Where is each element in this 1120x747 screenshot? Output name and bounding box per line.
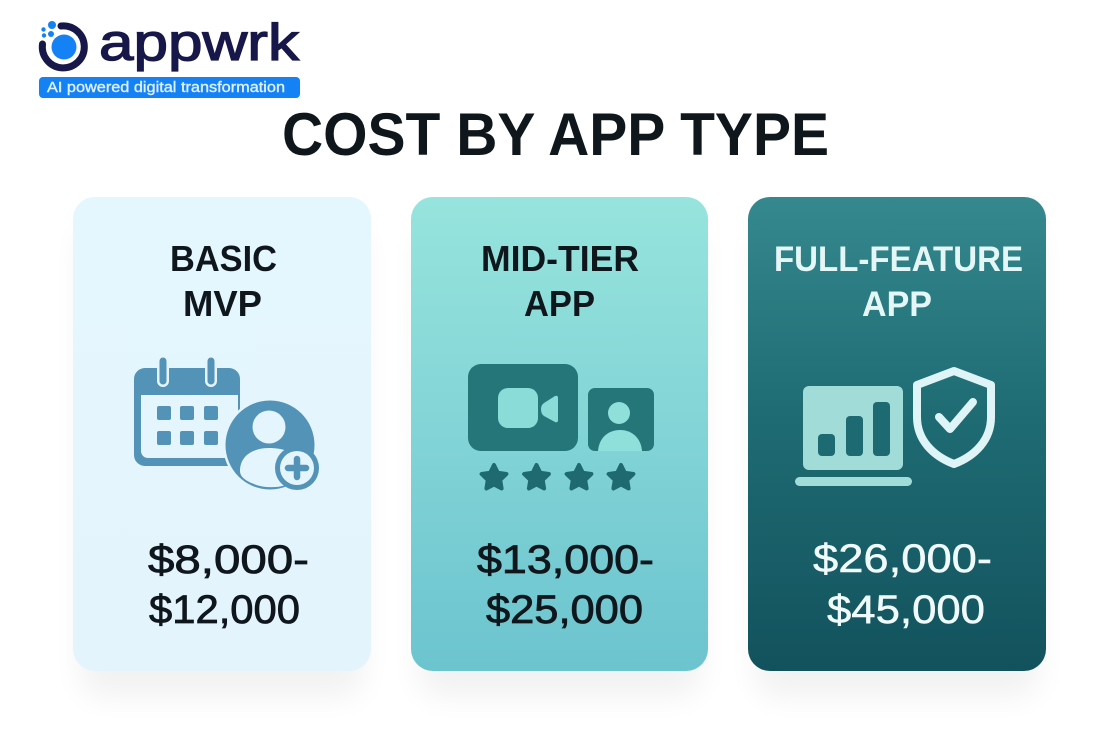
card shadow — [755, 225, 1039, 697]
panel: mid-tier app — [411, 197, 708, 697]
card background — [411, 197, 708, 671]
price: mid-tier app — [477, 538, 654, 632]
logo ring — [42, 26, 84, 68]
heading: full-feature app — [774, 240, 1023, 324]
price: full-feature app — [813, 537, 992, 632]
heading: basic mvp: MVP — [183, 283, 262, 324]
heading: mid-tier app: APP — [524, 283, 595, 324]
icon: video call with stars — [468, 364, 654, 488]
panel: basic mvp — [73, 197, 371, 697]
logo tagline pill — [39, 77, 300, 98]
title: COST BY APP TYPE — [282, 101, 829, 168]
heading: full-feature app: APP — [862, 285, 932, 324]
heading: basic mvp: BASIC — [170, 238, 277, 279]
price: basic mvp: $8,000- — [148, 538, 309, 582]
heading: basic mvp — [170, 238, 277, 324]
icon: analytics laptop and shield — [795, 371, 991, 486]
logo dots — [41, 21, 56, 38]
price: mid-tier app: $13,000- — [477, 538, 654, 582]
logo tagline pill: AI powered digital transformation — [47, 79, 285, 96]
card shadow — [80, 225, 364, 697]
card shadow — [418, 225, 701, 697]
price: basic mvp: $12,000 — [149, 588, 300, 632]
panel: full-feature app — [748, 197, 1046, 697]
price: full-feature app: $45,000 — [827, 588, 985, 632]
price: basic mvp — [148, 538, 309, 632]
card background — [748, 197, 1046, 671]
logo: appwrk — [39, 14, 300, 98]
price: full-feature app: $26,000- — [813, 537, 992, 581]
heading: full-feature app: FULL-FEATURE — [774, 240, 1023, 279]
icon: calendar with user plus — [134, 361, 319, 492]
logo wordmark: appwrk — [99, 14, 300, 72]
heading: mid-tier app: MID-TIER — [481, 238, 639, 279]
price: mid-tier app: $25,000 — [486, 588, 643, 632]
heading: mid-tier app — [481, 238, 639, 324]
card background — [73, 197, 371, 671]
logo core — [52, 34, 76, 60]
